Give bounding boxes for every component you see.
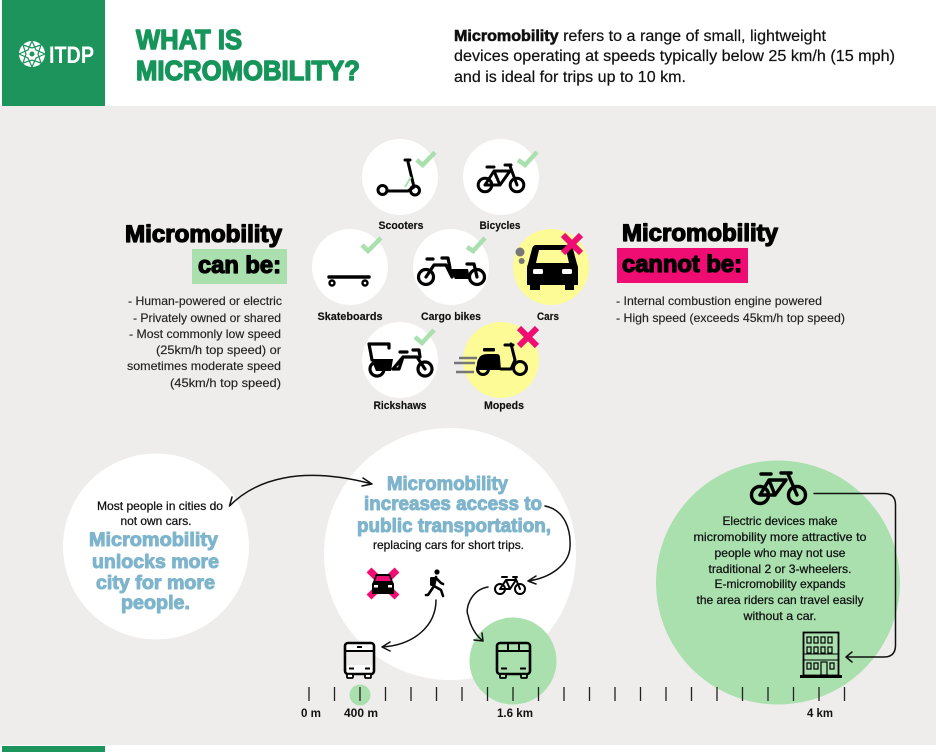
distance scale: 0 m [301, 708, 321, 720]
title: WHAT IS [136, 24, 242, 55]
text: increases access: public transportation, [357, 516, 551, 537]
icon: small bicycle [495, 577, 525, 594]
logo block: ITDP: ITDP [49, 42, 94, 69]
text: electric devices: Electric devices make [722, 514, 838, 528]
rickshaws item [362, 322, 438, 412]
skateboards item: Skateboards [318, 311, 382, 323]
distance scale: 400 m [344, 708, 378, 720]
title: MICROMOBILITY? [136, 55, 360, 86]
cars item [513, 229, 589, 323]
text: electric devices: without a car. [742, 609, 816, 623]
arrow: pedestrian to bus [382, 600, 436, 651]
arrow: between left and middle circles [230, 475, 372, 506]
panel: unlocks more city: people. [121, 593, 190, 614]
panel: unlocks more city: city for more [96, 573, 215, 594]
logo block: ITDP [2, 0, 105, 106]
text: increases access [357, 474, 551, 552]
green circle: 1.6 km catchment [470, 618, 556, 704]
panel: can be: can be: [198, 252, 281, 279]
panel: cannot be: cannot be: [622, 251, 742, 278]
icon: electric bike [752, 473, 806, 504]
green circle: 400 m catchment [350, 684, 370, 706]
panel: can be: (25km/h top speed) or [156, 343, 281, 357]
bicycles item [463, 139, 539, 232]
panel: can be: - Privately owned or shared [133, 311, 281, 325]
text: electric devices: people who may not use [714, 546, 846, 560]
panel: unlocks more city [63, 454, 249, 640]
mopeds item: Mopeds [484, 400, 524, 412]
panel: unlocks more city: Most people in cities do [97, 499, 223, 513]
panel: unlocks more city: Micromobility [89, 530, 218, 551]
large green circle: e-micromobility [656, 460, 900, 704]
skateboards item [312, 229, 388, 323]
distance scale: 1.6 km [497, 708, 533, 720]
arrow: electric bike to building [814, 494, 896, 662]
panel: can be: (45km/h top speed) [170, 376, 281, 390]
panel: can be: sometimes moderate speed [127, 359, 281, 373]
panel: can be: - Human-powered or electric [128, 294, 282, 308]
text: electric devices: traditional 2 or 3-wheelers. [708, 562, 852, 576]
intro text [454, 28, 895, 86]
icon: crossed out car [369, 570, 397, 597]
distance scale: 4 km [807, 708, 833, 720]
scooters item [362, 139, 438, 232]
arrow: text to small bicycle [528, 506, 570, 584]
panel: unlocks more city: unlocks more [92, 552, 219, 573]
text: electric devices [694, 514, 867, 623]
icon: bus at 400 m [345, 643, 374, 678]
text: electric devices: the area riders can travel easily [696, 593, 864, 607]
title [136, 24, 360, 86]
panel: can be: - Most commonly low speed [129, 327, 281, 341]
text: increases access: replacing cars for short trips. [373, 538, 524, 552]
panel: can be [125, 221, 287, 390]
text: electric devices: micromobility more attractive to [694, 530, 867, 544]
icon: pedestrian [426, 569, 443, 596]
large white circle: access to public transportation [324, 428, 576, 680]
icon: bus at 1.6 km [497, 643, 530, 678]
arrow: small bicycle to green bus [467, 587, 488, 641]
panel: cannot be: - High speed (exceeds 45km/h top speed) [616, 311, 845, 325]
panel: cannot be: - Internal combustion engine powered [616, 294, 822, 308]
panel: cannot be: Micromobility [622, 220, 779, 247]
cargo bikes item: Cargo bikes [421, 311, 481, 323]
panel: unlocks more city: not own cars. [120, 514, 192, 528]
cargo bikes item [413, 229, 489, 323]
footer green bar [2, 746, 105, 752]
rickshaws item: Rickshaws [374, 400, 426, 412]
panel: can be: Micromobility [125, 221, 283, 248]
mopeds item [454, 322, 539, 412]
text: increases access: Micromobility [387, 474, 508, 495]
icon: apartment building [800, 632, 842, 678]
intro text: and is ideal for trips up to 10 km. [454, 69, 686, 86]
panel: cannot be [616, 220, 845, 325]
text: increases access: increases access to [364, 494, 542, 515]
distance scale [301, 687, 844, 720]
text: electric devices: E-micromobility expands [714, 577, 846, 591]
bicycles item: Bicycles [480, 220, 520, 232]
cars item: Cars [537, 311, 559, 323]
intro text: Micromobility refers to a range of small, lightweight [454, 28, 827, 45]
intro text: devices operating at speeds typically below 25 km/h (15 mph) [454, 48, 895, 65]
scooters item: Scooters [378, 220, 424, 232]
